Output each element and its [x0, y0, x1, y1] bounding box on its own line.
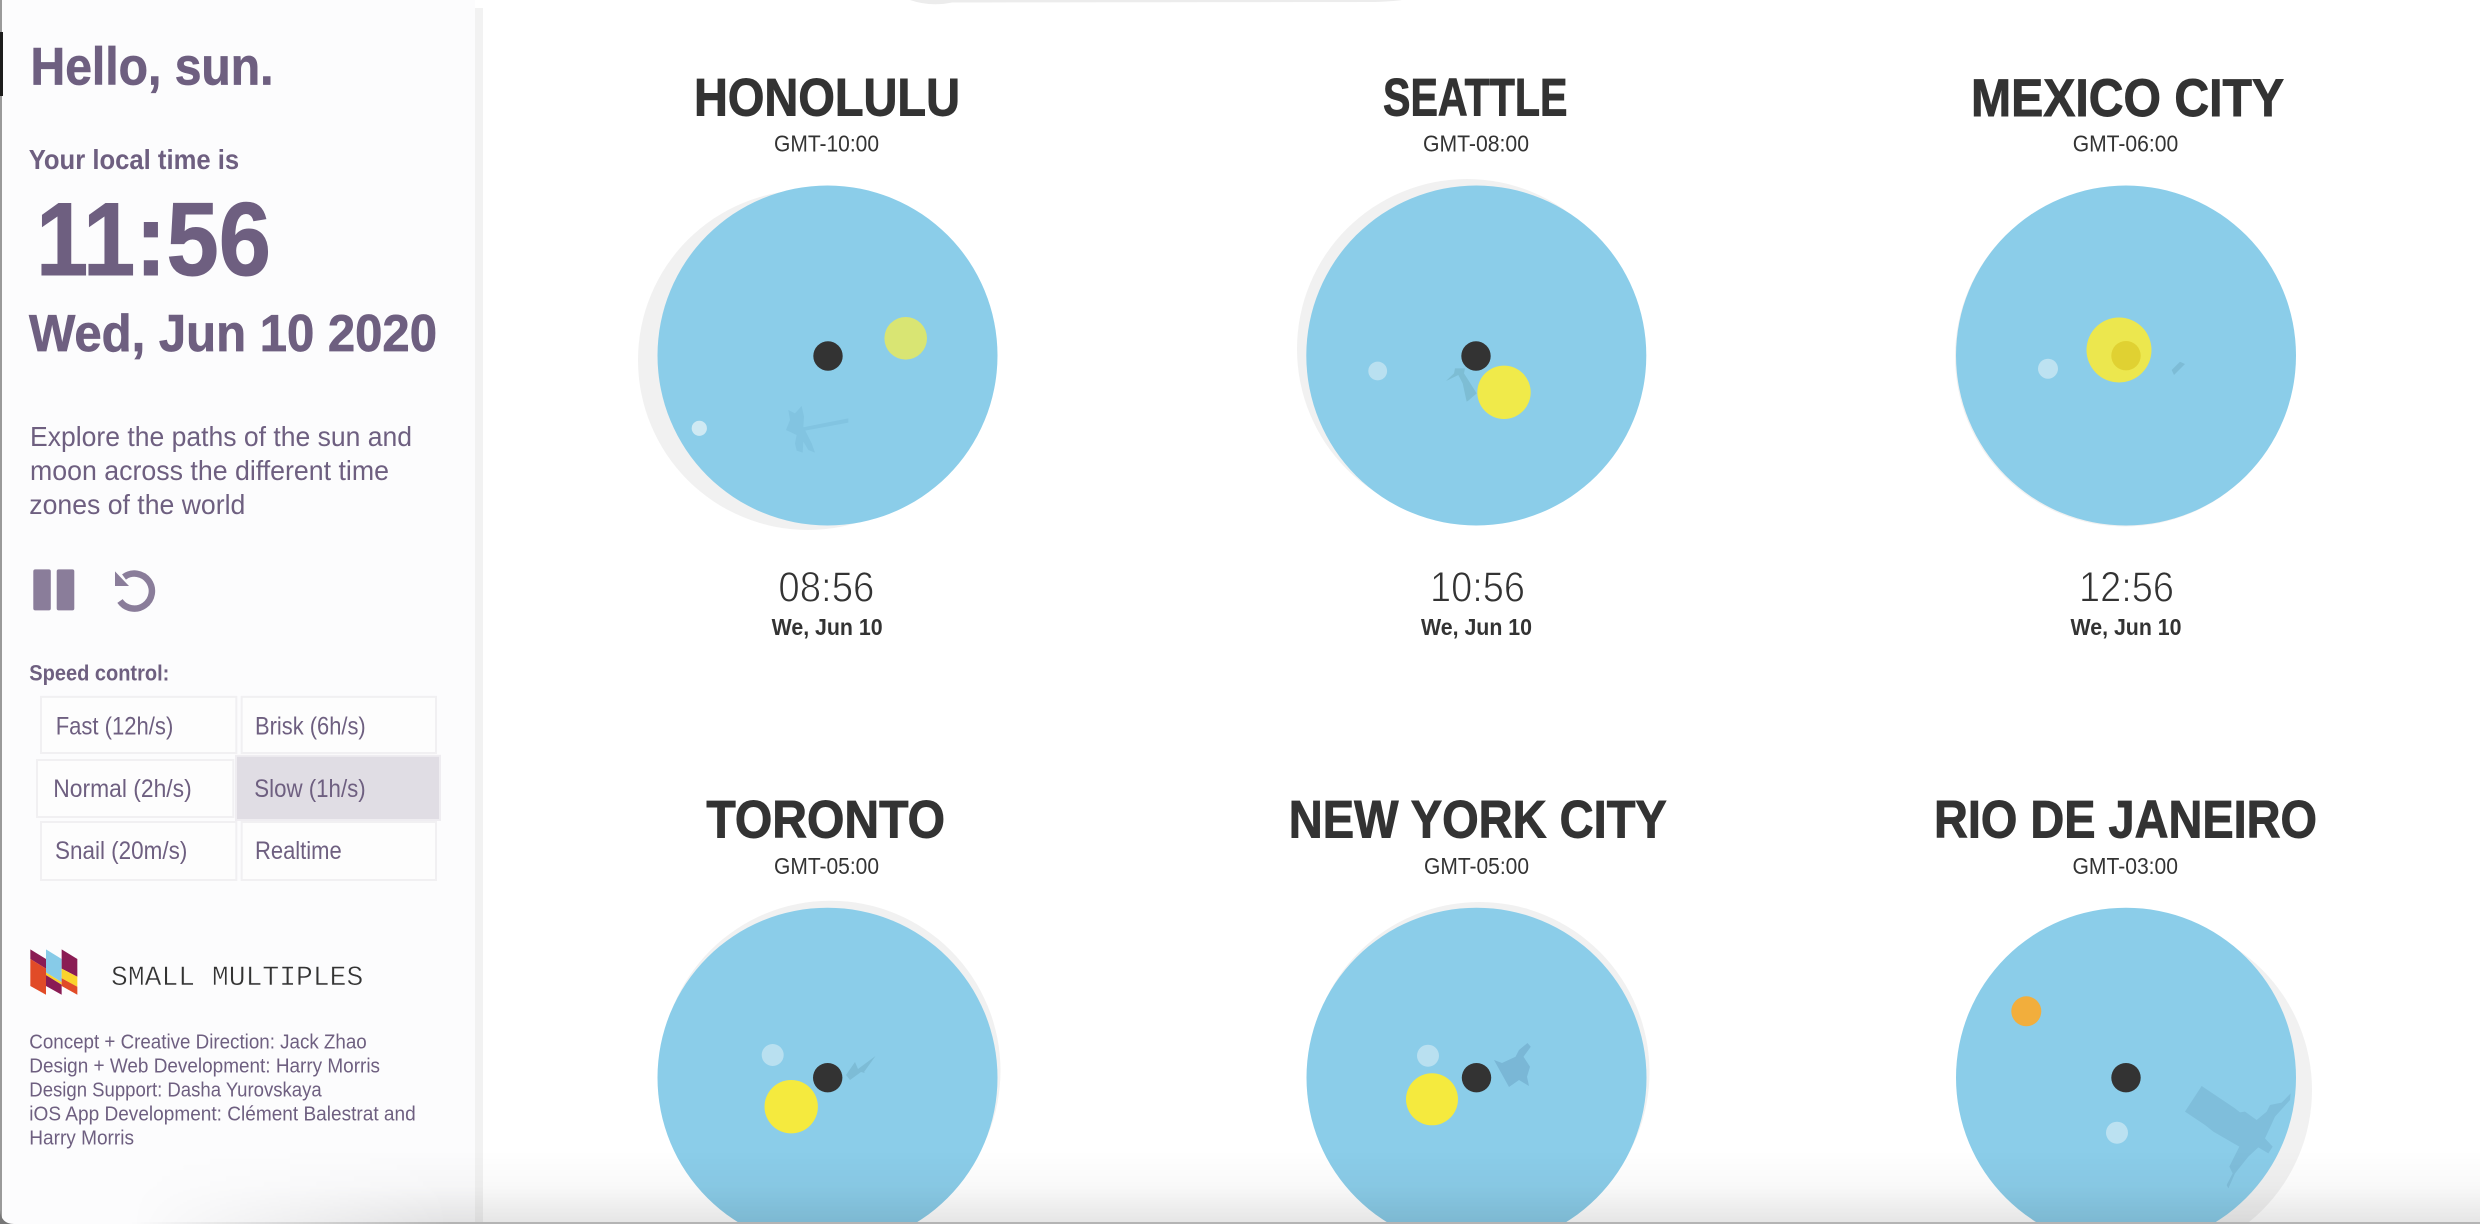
button: normal: Normal (2h/s) — [53, 775, 192, 803]
city title: SEATTLE — [1383, 69, 1568, 128]
moon — [1368, 362, 1387, 380]
button: fast: Fast (12h/s) — [56, 712, 173, 740]
city title: RIO DE JANEIRO — [1934, 791, 2317, 850]
credits: Harry Morris — [29, 1126, 134, 1149]
centre dot — [1461, 341, 1491, 371]
centre dot — [1462, 1063, 1491, 1092]
credits: Design Support: Dasha Yurovskaya — [29, 1078, 322, 1102]
centre dot — [813, 1063, 842, 1092]
panel: sidebar — [0, 0, 483, 1224]
local time: 10:56 — [1430, 564, 1525, 612]
local date: We, Jun 10 — [2070, 614, 2182, 640]
centre dot — [813, 341, 843, 371]
local time: 12:56 — [2079, 564, 2174, 612]
local date: We, Jun 10 — [772, 614, 883, 640]
moon — [2106, 1122, 2128, 1144]
window bottom shadow — [166, 1190, 2480, 1224]
button: slow (selected): Slow (1h/s) — [254, 775, 366, 803]
sun — [884, 317, 927, 360]
top window edge — [910, 0, 1402, 4]
silhouette: space needle — [1446, 368, 1477, 402]
panel: Seattle — [1297, 69, 1646, 640]
credits: Concept + Creative Direction: Jack Zhao — [29, 1030, 367, 1053]
silhouette: Christ the Redeemer — [2185, 1086, 2291, 1188]
sky dial — [638, 186, 998, 530]
button: brisk — [242, 697, 436, 753]
sun — [764, 1080, 818, 1133]
logo wordmark: SMALL MULTIPLES — [111, 963, 363, 994]
button: slow (selected) — [236, 756, 440, 820]
local date: Wed, Jun 10 2020 — [29, 305, 437, 363]
city title: HONOLULU — [694, 69, 960, 128]
moon — [762, 1044, 784, 1066]
logo: small multiples mark — [30, 949, 77, 995]
panel: Toronto — [658, 791, 1000, 1224]
window corner — [0, 1210, 14, 1224]
description text — [29, 421, 412, 520]
speed buttons — [37, 697, 440, 880]
city title: TORONTO — [706, 791, 945, 850]
sky dial — [1306, 902, 1650, 1224]
moon — [692, 421, 707, 436]
button: realtime — [242, 822, 436, 880]
timezone: GMT-06:00 — [2073, 131, 2178, 157]
button: brisk: Brisk (6h/s) — [255, 712, 366, 740]
city title: MEXICO CITY — [1971, 69, 2284, 128]
credits: iOS App Development: Clément Balestrat and — [29, 1102, 416, 1125]
local time: 08:56 — [778, 564, 874, 612]
sun — [1477, 366, 1531, 419]
timezone: GMT-05:00 — [1424, 853, 1529, 879]
local date: We, Jun 10 — [1421, 614, 1532, 640]
label: speed control: Speed control: — [29, 660, 169, 686]
sun — [2086, 318, 2152, 382]
silhouette: CN tower — [846, 1056, 876, 1080]
city title: NEW YORK CITY — [1289, 791, 1667, 850]
sky dial — [658, 901, 1000, 1224]
button: normal — [37, 760, 233, 817]
silhouette: palm tree — [786, 406, 848, 453]
sky dial — [1955, 186, 2296, 526]
sun — [2011, 996, 2041, 1026]
description text: zones of the world — [29, 489, 245, 520]
moon — [2038, 359, 2058, 379]
heading: Hello, sun: Hello, sun. — [30, 38, 274, 97]
sun — [1406, 1073, 1458, 1125]
timezone: GMT-10:00 — [774, 131, 879, 157]
credits: Design + Web Development: Harry Morris — [29, 1055, 380, 1078]
description text: Explore the paths of the sun and — [30, 421, 412, 452]
panel: Rio de Janeiro — [1934, 791, 2317, 1224]
timezone: GMT-03:00 — [2072, 853, 2178, 879]
icon: pause — [33, 569, 74, 610]
sky dial — [1297, 179, 1646, 526]
local time value: 11:56 — [36, 182, 271, 298]
silhouette: landmark — [2172, 362, 2185, 375]
panel: Mexico City — [1955, 69, 2296, 640]
silhouette: statue of liberty — [1494, 1043, 1531, 1087]
icon: reset — [115, 571, 152, 609]
button: snail — [41, 822, 236, 880]
button: realtime: Realtime — [255, 837, 342, 865]
timezone: GMT-05:00 — [774, 853, 879, 879]
centre dot through sun — [2111, 341, 2141, 370]
button: snail: Snail (20m/s) — [55, 837, 187, 865]
moon — [1417, 1045, 1439, 1067]
centre dot — [2111, 1063, 2141, 1092]
panel: Honolulu — [638, 69, 998, 640]
button: fast — [41, 697, 236, 753]
label: your local time: Your local time is — [29, 144, 239, 175]
timezone: GMT-08:00 — [1423, 131, 1529, 157]
panel: New York City — [1289, 791, 1667, 1224]
sky dial — [1956, 908, 2312, 1224]
description text: moon across the different time — [30, 455, 389, 486]
credits — [29, 1030, 416, 1149]
